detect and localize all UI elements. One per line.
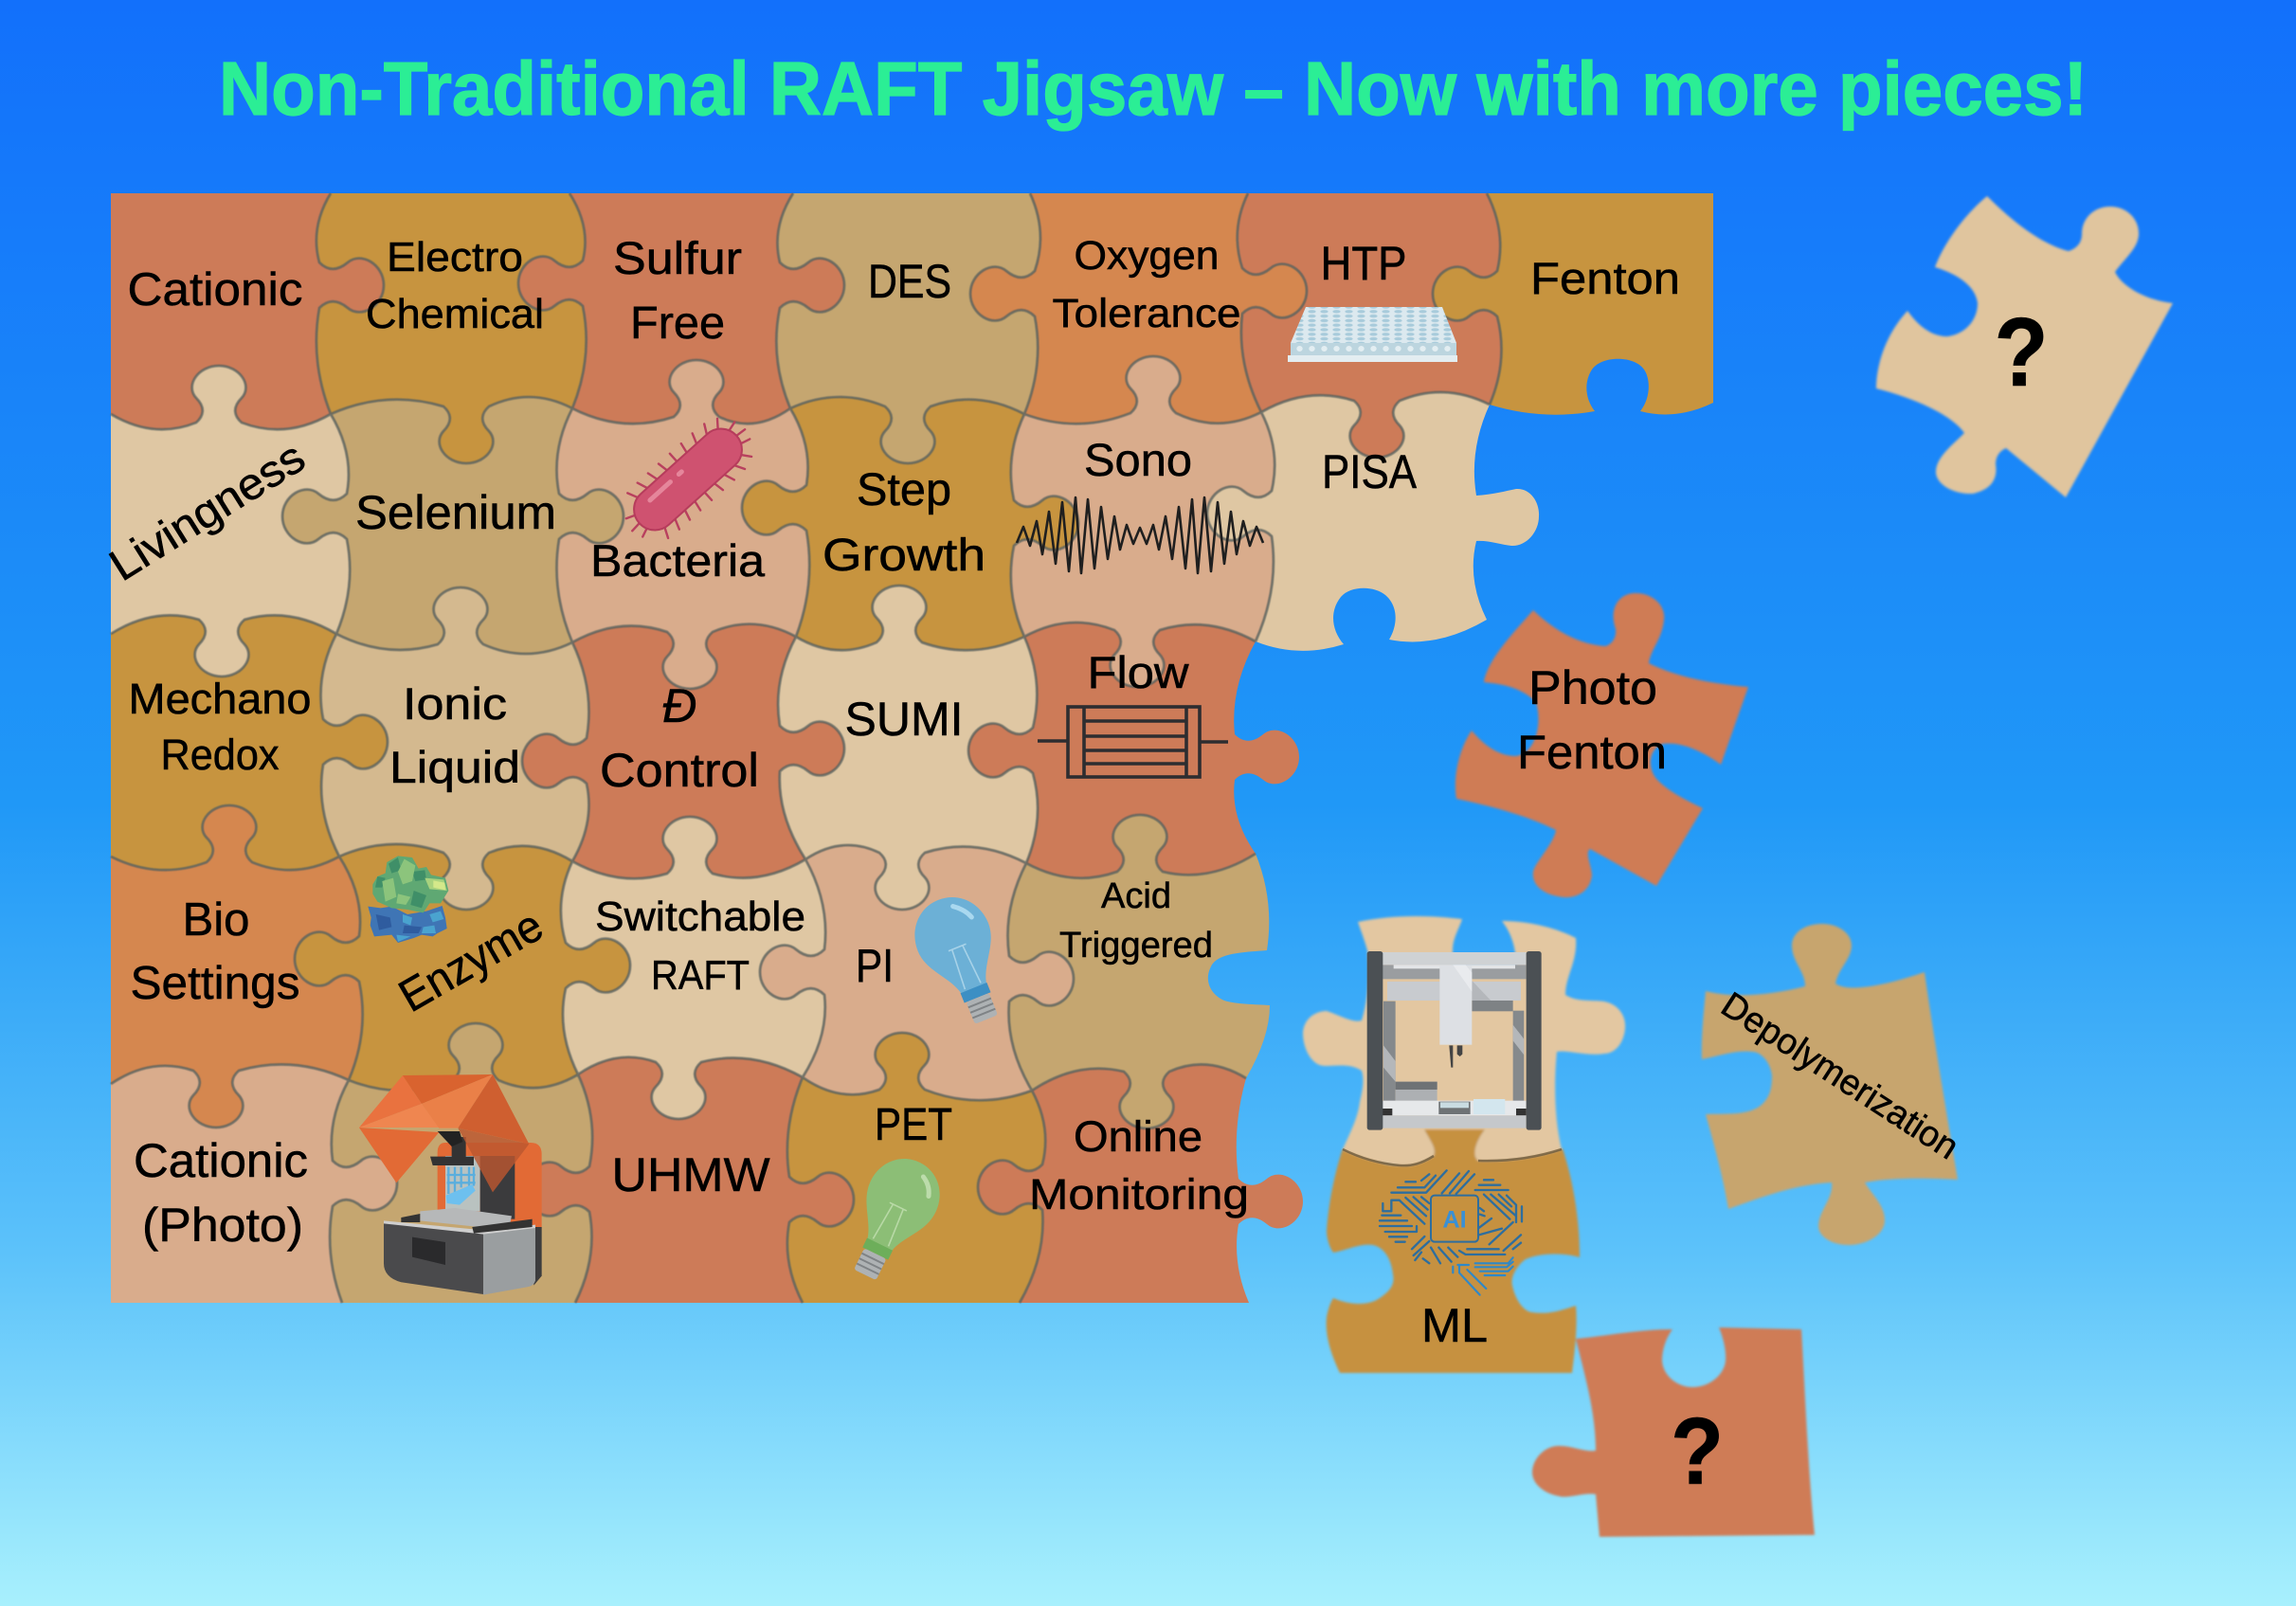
label: Switchable RAFT: RAFT	[651, 952, 750, 999]
piece: Selenium	[282, 397, 624, 654]
label: Step Growth: Step	[857, 465, 951, 515]
label: Depolymerization: Depolymerization	[1714, 985, 1965, 1167]
label: Online Monitoring: Online	[1074, 1112, 1202, 1161]
label: Bio Settings	[131, 894, 299, 1009]
label: Mechano Redox: Redox	[161, 731, 280, 779]
piece: DES	[776, 193, 1040, 463]
piece: Mechano Redox	[111, 615, 388, 870]
label: Livingness: Livingness	[100, 431, 314, 590]
piece: 3D printer	[330, 1023, 592, 1303]
icon: sonication wave	[1017, 497, 1263, 573]
label: SUMI: SUMI	[845, 693, 963, 746]
floating piece: bottom question mark	[1532, 1327, 1815, 1537]
label: Sono: Sono	[1084, 436, 1192, 486]
label: Bio Settings: Settings	[131, 958, 299, 1009]
icon: AI brain circuit	[1380, 1170, 1522, 1295]
label: Photo Fenton: Fenton	[1517, 726, 1667, 779]
label: Selenium: Selenium	[355, 486, 556, 539]
label: Switchable RAFT: Switchable	[595, 893, 805, 940]
label: Step Growth: Growth	[823, 531, 985, 581]
label: PI: PI	[856, 941, 894, 992]
piece: Bacteria	[556, 360, 809, 689]
label: Sulfur Free	[613, 234, 742, 349]
piece: Enzyme	[295, 844, 630, 1091]
label: Electro Chemical	[366, 234, 544, 337]
label: Oxygen Tolerance	[1052, 233, 1241, 336]
label: Enzyme: Enzyme	[391, 900, 551, 1022]
label: Ionic Liquid: Ionic	[403, 678, 507, 729]
label: PET: PET	[875, 1100, 952, 1150]
icon: AI brain circuit: AI	[1442, 1206, 1467, 1233]
label: question mark top right: ?	[1994, 298, 2049, 406]
piece: Livingness	[111, 366, 350, 677]
label: Step Growth	[823, 465, 985, 581]
label: question mark bottom: ?	[1671, 1398, 1724, 1505]
label: Cationic (Photo): (Photo)	[142, 1199, 303, 1252]
seam lines between board pieces	[111, 193, 1501, 1303]
label: Cationic (Photo)	[134, 1134, 308, 1252]
label: Oxygen Tolerance: Oxygen	[1075, 233, 1219, 279]
icon: bacterium	[610, 406, 766, 553]
piece: PISA	[1207, 392, 1539, 651]
label: Acid Triggered: Triggered	[1059, 926, 1213, 965]
floating pieces	[1303, 196, 2173, 1537]
label: Switchable RAFT	[595, 893, 805, 999]
label: PISA: PISA	[1322, 445, 1418, 498]
label: Online Monitoring: Monitoring	[1029, 1170, 1249, 1218]
piece: Online Monitoring	[978, 1064, 1303, 1303]
label: Sulfur Free: Sulfur	[613, 234, 742, 284]
icon: 3D printer	[359, 1074, 542, 1295]
piece: Flow	[968, 623, 1299, 878]
piece: UHMW	[525, 1057, 854, 1303]
icon: enzyme	[368, 856, 448, 943]
label: DES: DES	[868, 255, 951, 308]
label: Electro Chemical: Chemical	[366, 291, 544, 337]
piece: Fenton	[1433, 193, 1713, 415]
floating piece: ML	[1327, 1129, 1580, 1373]
seam between liquid handler and ML pieces	[1343, 1149, 1562, 1165]
label: Dispersity Control: Ð	[662, 679, 696, 732]
title: Non-Traditional RAFT Jigsaw – Now with more pieces!	[219, 46, 2088, 131]
piece: Cationic (Photo)	[111, 1064, 397, 1303]
label: Mechano Redox	[129, 675, 311, 779]
icon: flow reactor	[1038, 707, 1228, 777]
label: Fenton: Fenton	[1530, 253, 1680, 303]
label: Dispersity Control	[600, 679, 759, 797]
floating piece: top-right question mark	[1876, 196, 2173, 497]
label: Electro Chemical: Electro	[387, 234, 523, 280]
piece: PI	[760, 845, 1074, 1100]
piece: Dispersity Control	[522, 624, 844, 878]
label: Ionic Liquid: Liquid	[389, 742, 520, 792]
piece: Step Growth	[742, 397, 1078, 650]
piece: HTP	[1238, 193, 1501, 458]
label: ML: ML	[1421, 1299, 1488, 1352]
piece: Sulfur Free	[518, 193, 844, 424]
floating piece: liquid handler	[1303, 916, 1625, 1165]
label: Sulfur Free: Free	[630, 298, 725, 349]
label: Mechano Redox: Mechano	[129, 675, 311, 723]
label: UHMW: UHMW	[612, 1148, 770, 1201]
label: Cationic: Cationic	[127, 264, 303, 316]
icon: green light bulb	[833, 1146, 952, 1290]
piece: Switchable RAFT	[561, 817, 825, 1119]
label: Acid Triggered: Acid	[1101, 876, 1171, 916]
label: HTP: HTP	[1321, 237, 1406, 290]
floating piece: Depolymerization	[1702, 924, 1958, 1245]
piece: Oxygen Tolerance	[970, 193, 1307, 424]
label: Photo Fenton	[1517, 661, 1667, 779]
piece: Sono	[1011, 356, 1275, 687]
icon: liquid handling robot	[1367, 951, 1542, 1130]
piece: Electro Chemical	[316, 193, 587, 463]
label: Online Monitoring	[1029, 1112, 1249, 1218]
label: Dispersity Control: Control	[600, 744, 759, 797]
label: Bacteria: Bacteria	[590, 535, 766, 586]
jigsaw board pieces	[111, 193, 1713, 1303]
label: Flow: Flow	[1088, 647, 1190, 697]
piece: Ionic Liquid	[320, 587, 588, 910]
label: Ionic Liquid	[389, 678, 520, 792]
icon: blue light bulb	[903, 886, 1021, 1034]
piece: PET	[787, 1033, 1045, 1303]
floating piece: Photo Fenton	[1455, 593, 1748, 897]
piece: Bio Settings	[111, 805, 363, 1128]
label: Bio Settings: Bio	[182, 894, 250, 946]
piece: SUMI	[778, 586, 1038, 910]
label: Photo Fenton: Photo	[1528, 661, 1657, 714]
piece: Cationic	[111, 193, 384, 429]
label: Oxygen Tolerance: Tolerance	[1052, 291, 1241, 336]
label: Acid Triggered	[1059, 876, 1213, 965]
icon: well plate	[1288, 307, 1457, 362]
piece: Acid Triggered	[1007, 815, 1270, 1128]
label: Cationic (Photo): Cationic	[134, 1134, 308, 1187]
